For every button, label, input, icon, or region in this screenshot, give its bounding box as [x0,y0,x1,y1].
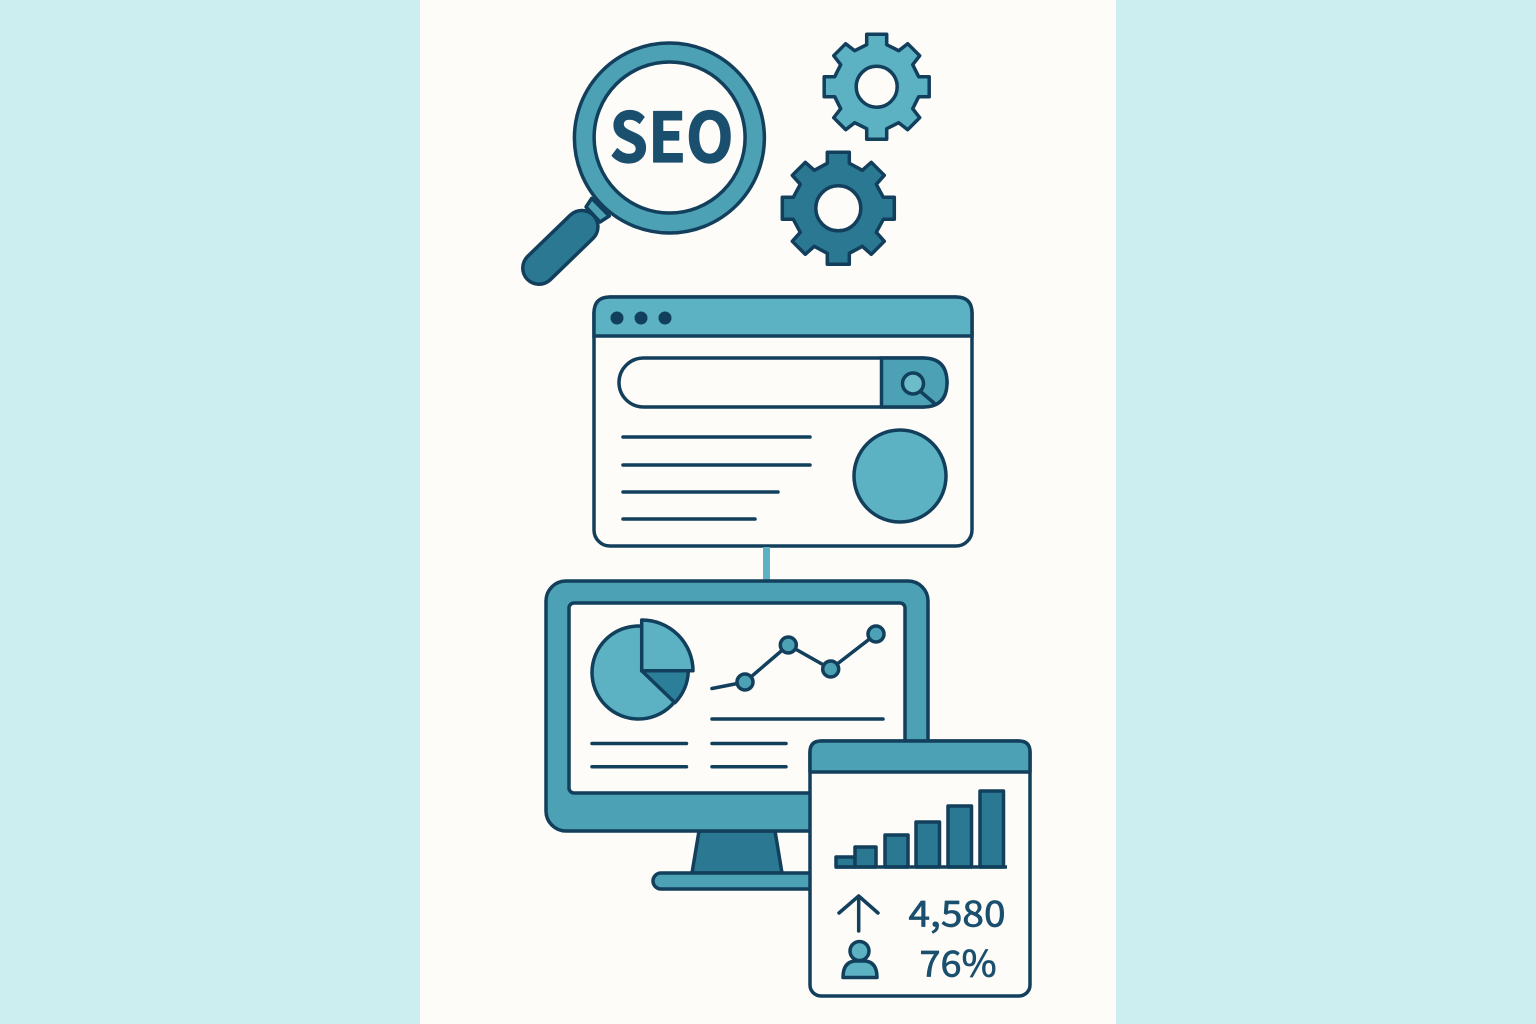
connector [763,547,770,581]
conversion value: 76% [920,936,996,988]
text lines [623,437,810,519]
icon: user [843,942,877,978]
pie chart [592,620,693,719]
image circle [854,430,946,522]
icon: up arrow [839,896,878,931]
panel: browser window [594,297,972,546]
traffic value: 4,580 [908,886,1006,938]
icon: light gear [824,34,929,139]
panel: desktop monitor [546,581,928,889]
bar chart [835,791,1007,867]
monitor stand [692,831,782,873]
search bar [619,358,947,407]
SEO label: SEO [610,83,734,182]
icon: SEO magnifying glass [539,43,764,268]
card header [810,741,1030,772]
line chart [712,626,884,690]
window dots [610,312,672,324]
monitor text lines [592,719,883,767]
icon: dark gear [782,152,894,264]
panel: stats card [810,741,1030,996]
browser title bar [594,297,972,336]
